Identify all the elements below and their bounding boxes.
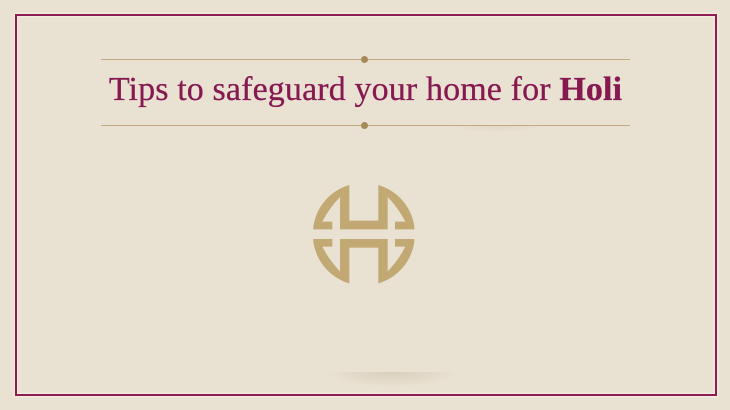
logo: gold H monogram in a circle <box>313 185 414 284</box>
soft shadow above bottom frame <box>325 372 460 387</box>
top dot <box>361 56 368 63</box>
bottom rule <box>101 125 630 126</box>
bottom dot <box>361 122 368 129</box>
soft shadow below top section <box>450 126 545 132</box>
title block <box>101 56 630 129</box>
top rule <box>101 59 630 60</box>
logo top half <box>313 185 414 229</box>
logo bottom half <box>313 239 414 283</box>
title: Tips to safeguard your home for Holi <box>109 71 622 108</box>
